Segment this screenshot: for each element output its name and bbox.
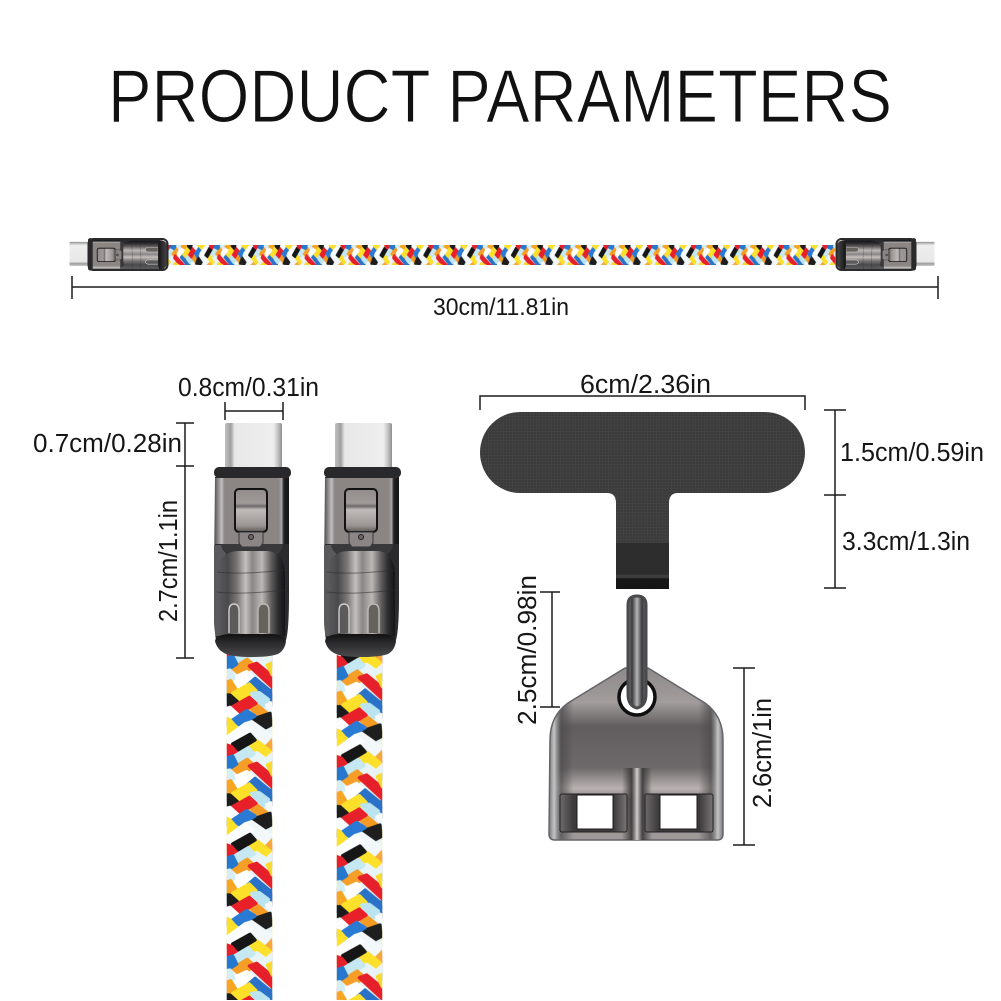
dimension: ring height [514, 575, 560, 725]
dimension: plug and connector height [33, 423, 194, 658]
braid right [337, 650, 382, 1000]
dimension: cable length [72, 276, 938, 321]
right vertical cable [324, 423, 401, 1000]
dimension: ring height: 2.5cm/0.98in [514, 575, 542, 725]
dimension: connector width [178, 374, 319, 420]
metal buckle with ring [549, 596, 723, 840]
braid left [227, 650, 272, 1000]
buckle body [549, 668, 723, 840]
left window [560, 794, 627, 832]
ring [628, 596, 646, 708]
dimension: patch heights: 1.5cm/0.59in [840, 439, 984, 467]
connector left [214, 423, 291, 657]
braided cable strip [168, 245, 835, 265]
connector right [324, 423, 401, 657]
dimension: cable length: 30cm/11.81in [433, 294, 569, 321]
T-shaped patch [480, 412, 805, 589]
dimension: patch heights: 3.3cm/1.3in [842, 528, 970, 556]
title: PRODUCT PARAMETERS [108, 54, 892, 138]
right window [645, 794, 713, 832]
dimension: plug and connector height: 0.7cm/0.28in [33, 430, 182, 458]
ring hole [619, 679, 655, 715]
dimension: plug and connector height: 2.7cm/1.1in [155, 500, 183, 622]
left vertical cable [214, 423, 291, 1000]
right connector small [836, 238, 934, 270]
dimension: buckle height [733, 668, 777, 845]
horizontal full-length cable [70, 238, 934, 270]
dimension: patch width [480, 371, 805, 410]
dimension: buckle height: 2.6cm/1in [749, 698, 777, 808]
dimension: patch heights [824, 410, 984, 588]
dimension: patch width: 6cm/2.36in [580, 371, 711, 399]
left connector small [70, 238, 168, 270]
dimension: connector width: 0.8cm/0.31in [178, 374, 319, 402]
